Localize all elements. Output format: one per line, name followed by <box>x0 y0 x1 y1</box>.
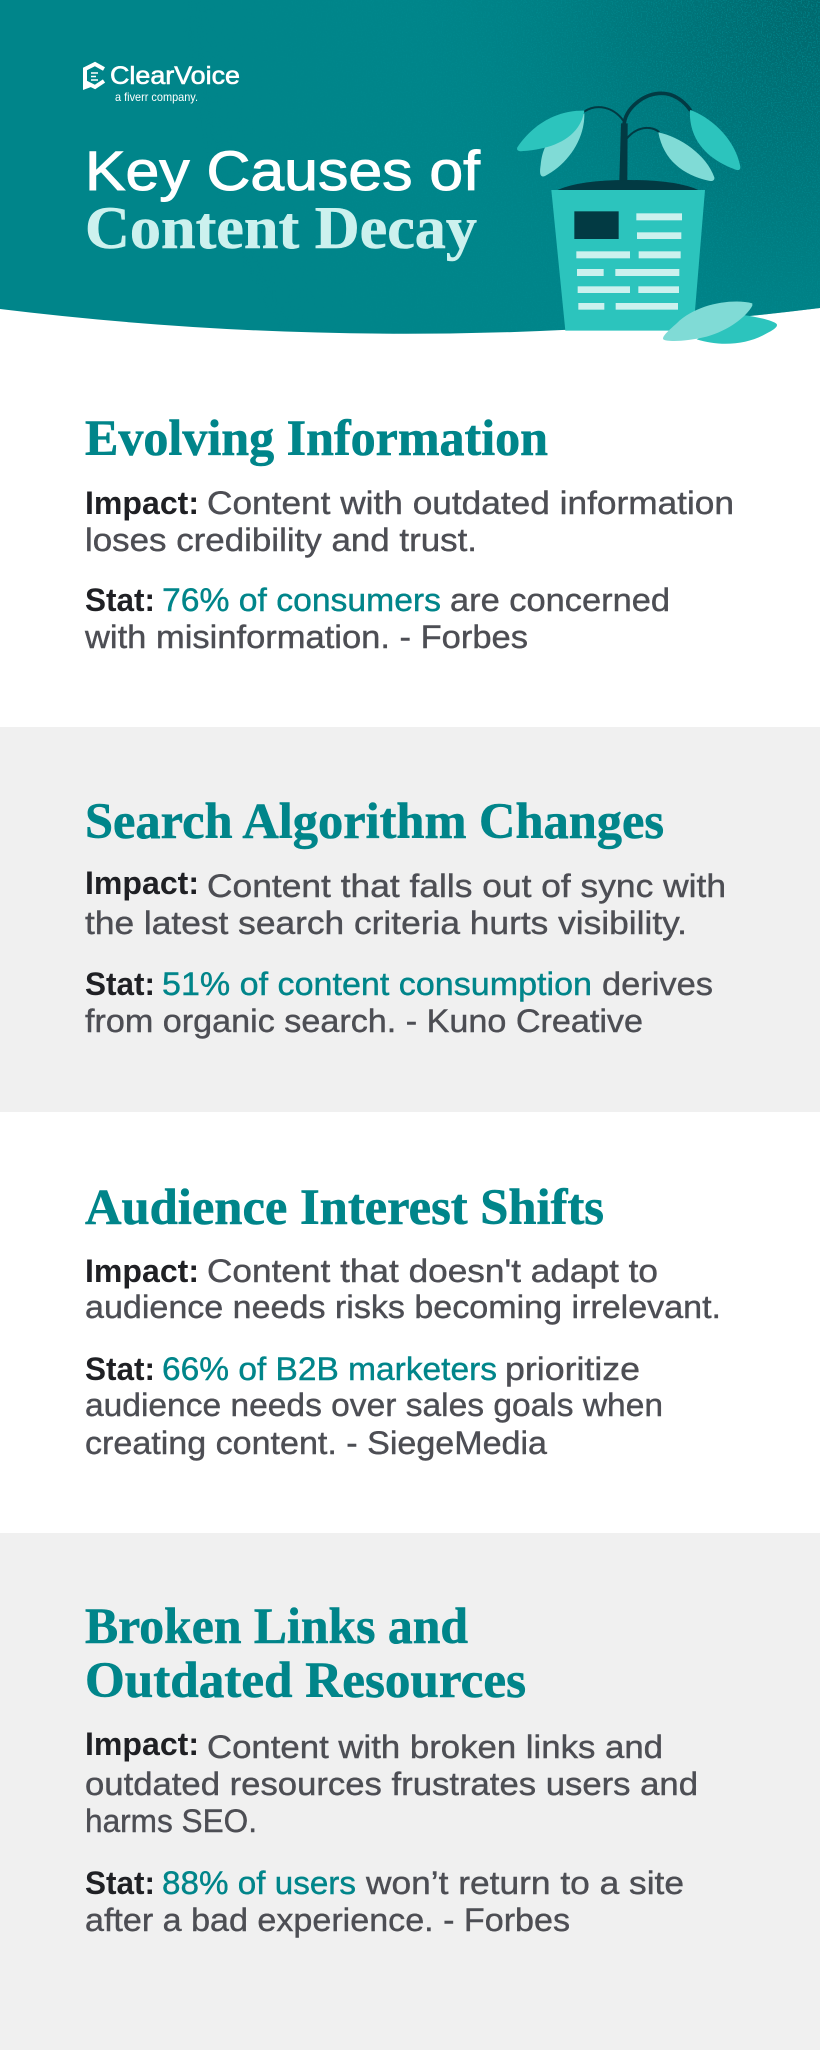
stat text: Stat: <box>85 1351 155 1387</box>
logo: ClearVoice: ClearVoice <box>110 62 240 90</box>
stat text: 88% of users <box>162 1865 356 1901</box>
impact text <box>85 865 726 941</box>
icon: ClearVoice hexagon <box>83 64 104 90</box>
heading: Evolving Information <box>85 411 548 467</box>
stat text <box>85 1865 684 1938</box>
stat text: 51% of content consumption <box>162 966 592 1002</box>
impact text: Content with broken links and <box>207 1729 663 1765</box>
stat text: 66% of B2B marketers <box>162 1351 497 1387</box>
panel: search algorithm changes <box>0 727 820 1112</box>
logo: ClearVoice <box>83 62 240 104</box>
title <box>85 139 480 261</box>
title: Content Decay <box>85 195 477 261</box>
heading <box>85 1599 526 1709</box>
stat text: Stat: <box>85 582 155 618</box>
title: Key Causes of <box>85 139 480 202</box>
impact text: the latest search criteria hurts visibility. <box>85 905 687 941</box>
stat text: from organic search. - Kuno Creative <box>85 1003 643 1039</box>
icon: document pot <box>551 190 705 331</box>
impact text <box>85 485 734 558</box>
impact text: harms SEO. <box>85 1803 257 1839</box>
icon: fallen leaves <box>663 302 777 344</box>
impact text: Content with outdated information <box>207 485 734 521</box>
icon: soil <box>557 180 698 190</box>
impact text: Impact: <box>85 865 199 901</box>
stat text: won’t return to a site <box>365 1865 684 1901</box>
icon: right leaves <box>658 110 740 181</box>
heading: Audience Interest Shifts <box>85 1180 604 1236</box>
stat text: prioritize <box>505 1351 640 1387</box>
stat text <box>85 966 713 1039</box>
stat text: audience needs over sales goals when <box>85 1387 663 1423</box>
stat text <box>84 582 670 655</box>
impact text: Impact: <box>85 1253 199 1289</box>
impact text <box>85 1253 721 1325</box>
heading: Broken Links and <box>85 1599 468 1655</box>
impact text: Impact: <box>85 1726 199 1762</box>
stat text <box>85 1351 663 1461</box>
impact text: Content that falls out of sync with <box>207 868 726 904</box>
stat text: are concerned <box>450 582 670 618</box>
stat text: 76% of consumers <box>162 582 441 618</box>
heading: Outdated Resources <box>85 1653 526 1709</box>
panel: broken links and outdated resources <box>0 1533 820 2050</box>
stat text: creating content. - SiegeMedia <box>85 1425 547 1461</box>
illustration: wilting plant in document pot <box>517 93 777 344</box>
impact text <box>85 1726 698 1839</box>
stat text: Stat: <box>85 1865 155 1901</box>
icon: left leaves <box>517 111 584 176</box>
impact text: Impact: <box>85 485 199 521</box>
panel: evolving information <box>84 411 734 655</box>
heading: Search Algorithm Changes <box>85 794 664 850</box>
stat text: Stat: <box>85 966 155 1002</box>
impact text: Content that doesn't adapt to <box>207 1253 658 1289</box>
stat text: with misinformation. - Forbes <box>84 619 528 655</box>
header banner <box>0 0 820 350</box>
icon: stems <box>584 93 691 181</box>
panel: audience interest shifts <box>85 1180 721 1461</box>
stat text: after a bad experience. - Forbes <box>85 1902 570 1938</box>
impact text: audience needs risks becoming irrelevant. <box>85 1289 721 1325</box>
logo: ClearVoice: a fiverr company. <box>115 90 198 104</box>
impact text: loses credibility and trust. <box>85 522 477 558</box>
stat text: derives <box>602 966 713 1002</box>
impact text: outdated resources frustrates users and <box>85 1766 698 1802</box>
